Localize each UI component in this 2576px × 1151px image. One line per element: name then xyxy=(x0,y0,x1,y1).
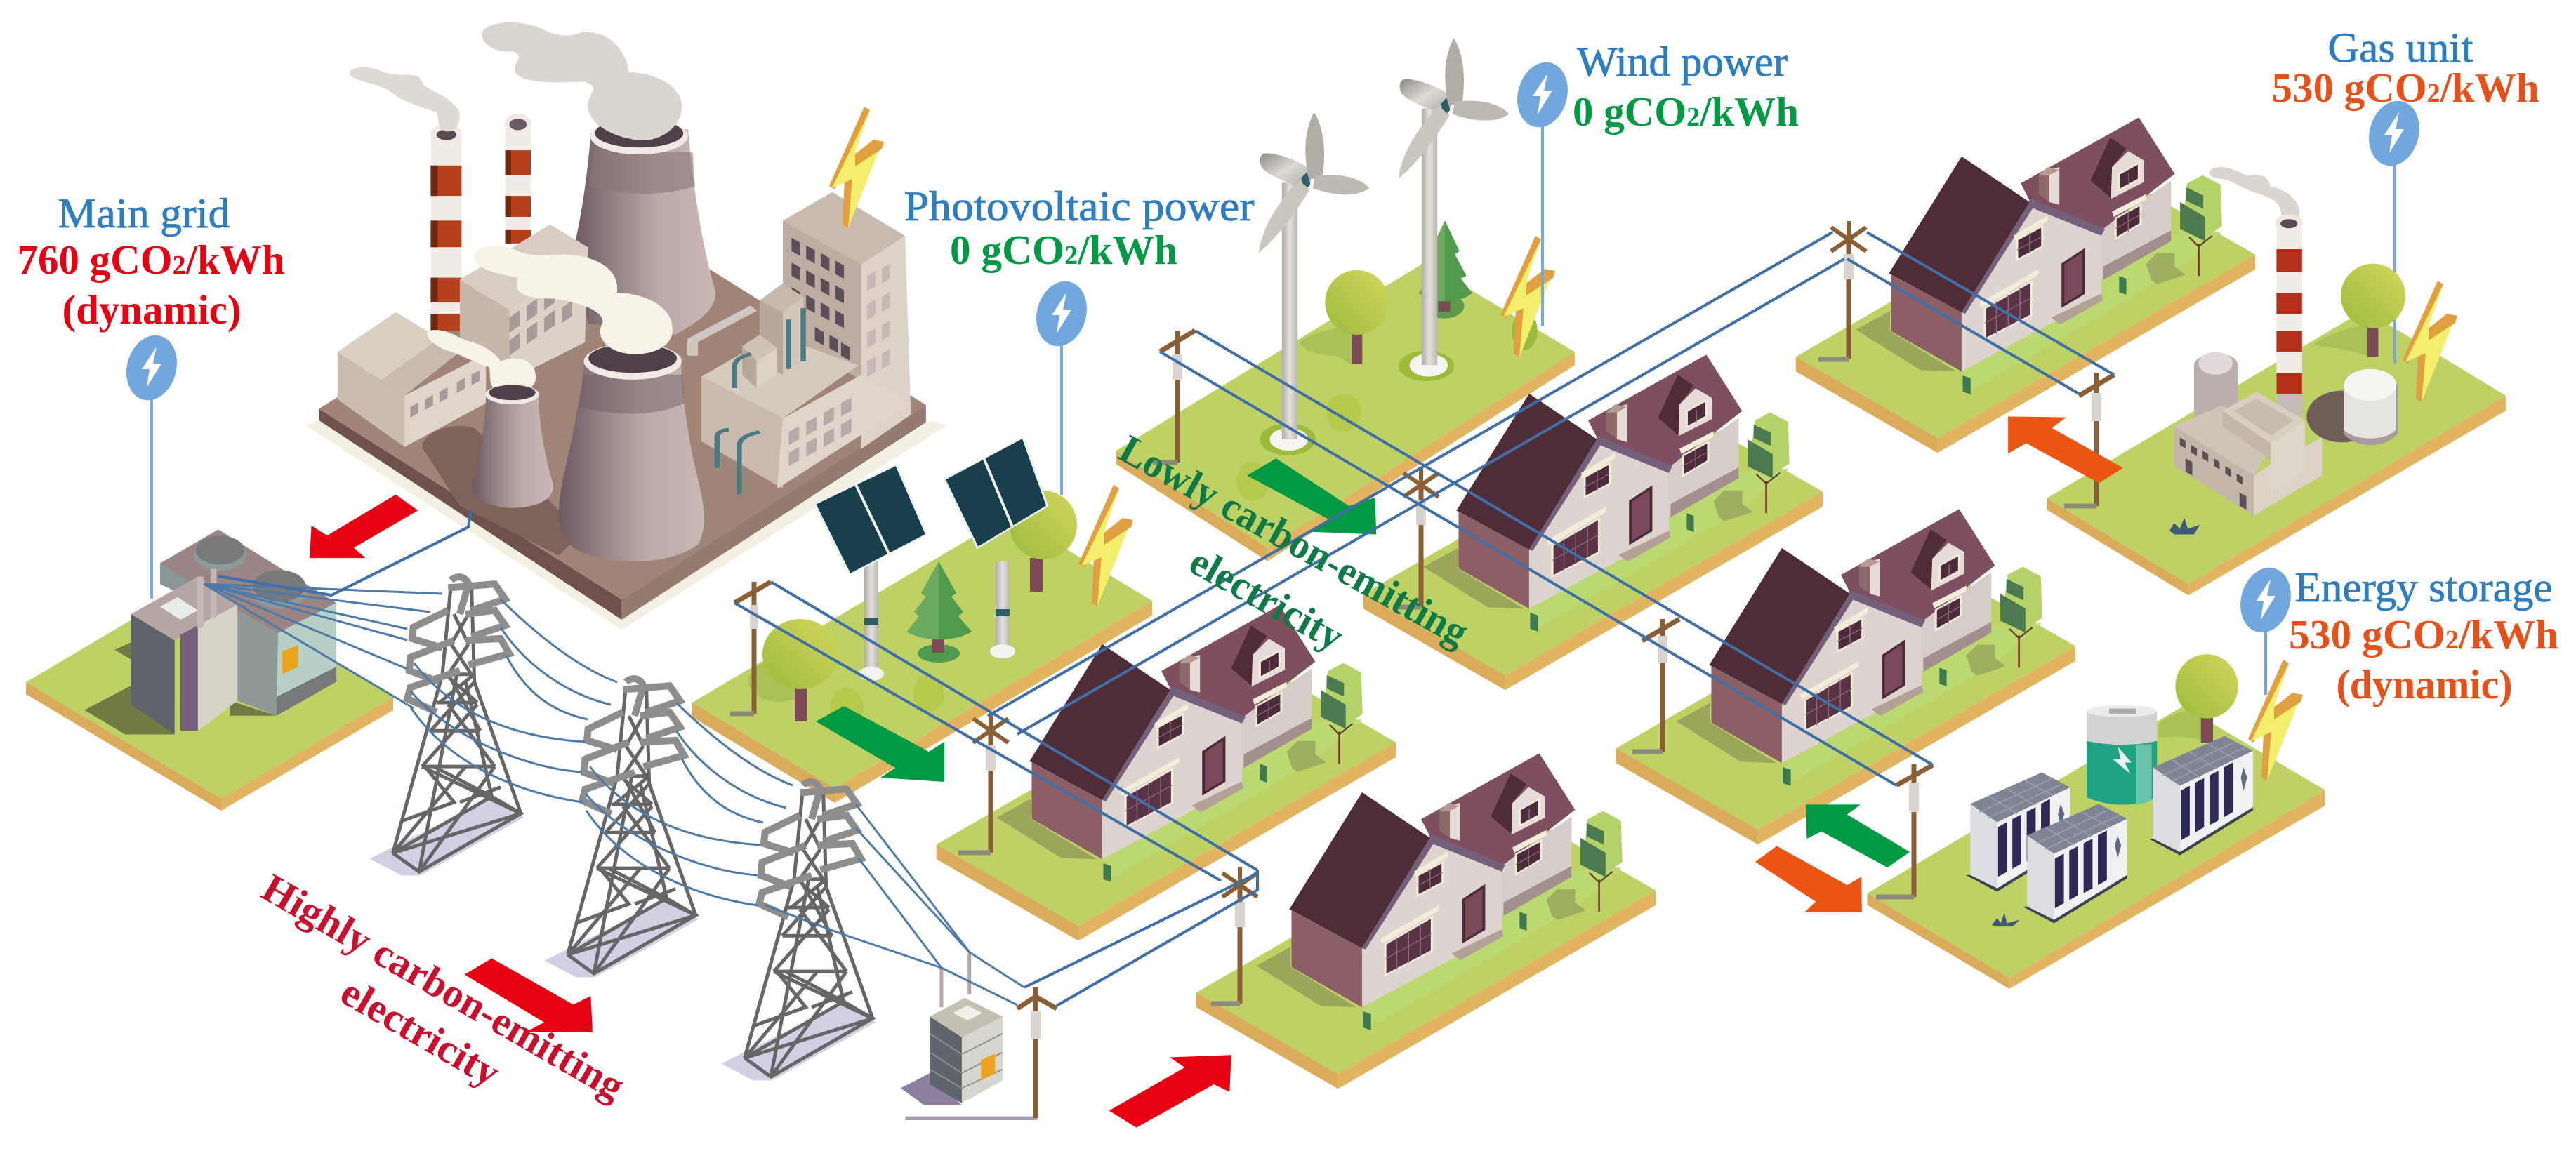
caption: highly carbon-emitting electricity: Highly carbon-emitting xyxy=(254,865,633,1109)
cooling tower: back xyxy=(574,118,715,335)
building: tall office block xyxy=(783,192,911,449)
gas tank round xyxy=(2306,369,2398,445)
icon: lightning bolt at gas unit xyxy=(2403,281,2457,402)
label: wind power xyxy=(1573,39,1799,135)
smoke: back tower xyxy=(482,22,682,140)
utility pole: photovoltaic xyxy=(730,582,771,714)
solar panel: right post xyxy=(990,561,1015,658)
wires: photovoltaic line to bottom pole xyxy=(734,582,1257,881)
tree: round xyxy=(1300,270,1389,365)
smoke: small tower xyxy=(428,330,536,393)
building: rear block xyxy=(460,225,588,380)
icon: lightning bolt at wind farm xyxy=(1500,236,1555,357)
wires: top house to gas pole xyxy=(1847,232,2114,394)
tree: pine xyxy=(1419,220,1472,319)
bushes xyxy=(1236,312,1538,501)
panel: house bottom xyxy=(1196,753,1656,1089)
chimney: right xyxy=(505,114,531,244)
icon: lightning bolt at photovoltaic xyxy=(1078,485,1133,606)
battery rack: front xyxy=(2023,804,2127,923)
battery rack: back left xyxy=(1966,773,2070,892)
panel: house storage side xyxy=(1616,509,2075,844)
smoke: left chimney xyxy=(349,67,460,131)
wires: transformer to tower 1 xyxy=(204,510,471,708)
icon: lightning bolt at storage xyxy=(2248,660,2303,781)
wires: tower 1 to tower 2 xyxy=(411,599,617,802)
panel: main grid tile xyxy=(26,580,393,811)
tree: round behind panel xyxy=(1010,491,1077,592)
utility pole: storage xyxy=(1876,764,1933,897)
building: left low block xyxy=(338,312,486,447)
building: front low block xyxy=(693,284,911,495)
icon: distribution meter box xyxy=(901,952,1038,1118)
caption: lowly carbon-emitting electricity: Lowly carbon-emitting xyxy=(1112,426,1476,655)
label: wind power: 0 gCO2/kWh xyxy=(1573,88,1799,135)
wind turbine: front xyxy=(1259,112,1369,455)
label: gas unit: Gas unit xyxy=(2328,25,2473,71)
gas unit smoke xyxy=(2210,167,2299,217)
panel: house left xyxy=(937,605,1396,940)
utility pole: meter xyxy=(1017,987,1057,1118)
grass tuft xyxy=(2169,518,2200,535)
wires: tower 2 to tower 3 xyxy=(586,703,793,905)
label: photovoltaic power xyxy=(904,183,1255,273)
cooling tower: small xyxy=(473,385,553,508)
tower: transmission 1 xyxy=(369,577,524,876)
grass tuft xyxy=(1992,912,2019,926)
plant base platform xyxy=(305,215,946,630)
wind turbine: rear xyxy=(1399,38,1509,381)
label: main grid: Main grid xyxy=(58,190,230,237)
arrow: red along transmission line xyxy=(465,958,593,1032)
battery cylinder xyxy=(2087,705,2157,805)
label: main grid: 760 gCO2/kWh xyxy=(17,237,284,283)
arrow: green from storage xyxy=(1806,804,1910,867)
panel: coal power plant xyxy=(305,22,946,630)
icon: transformer station xyxy=(84,529,336,735)
panel: photovoltaic tile xyxy=(692,437,1152,803)
panel: wind power tile xyxy=(1116,38,1575,561)
solar panel: right xyxy=(944,437,1048,547)
tree: pine xyxy=(907,561,972,663)
gas tower line xyxy=(2393,164,2396,364)
tree: left round xyxy=(748,619,838,721)
icon: lightning bolt at plant xyxy=(829,107,884,228)
wires: bottom pole to meter pole xyxy=(1024,870,1257,1006)
storage tree xyxy=(2158,654,2238,743)
arrow: orange to storage xyxy=(1755,846,1862,912)
label: energy storage: (dynamic) xyxy=(2337,661,2512,707)
solar panel: left post xyxy=(859,561,884,681)
pin: main grid xyxy=(119,330,184,599)
panel: house center xyxy=(1363,354,1823,690)
bushes xyxy=(830,675,944,727)
cooling tower: front xyxy=(559,343,704,561)
arrow: green from wind xyxy=(1247,458,1376,535)
pin: gas unit xyxy=(2362,95,2426,171)
label: gas unit: 530 gCO2/kWh xyxy=(2272,65,2539,111)
utility pole: top house xyxy=(1818,221,1866,359)
tower: transmission 2 xyxy=(544,679,699,978)
wires: wind line to storage pole xyxy=(1160,331,1933,785)
wires: left house to top house xyxy=(988,232,1844,734)
label: photovoltaic power: Photovoltaic power xyxy=(904,183,1255,229)
label: photovoltaic power: 0 gCO2/kWh xyxy=(950,227,1177,273)
solar panel: left xyxy=(815,465,927,574)
panel: gas unit tile xyxy=(2047,164,2506,595)
caption: lowly carbon-emitting electricity: electricity xyxy=(1182,538,1352,660)
utility pole: center house xyxy=(1394,467,1439,607)
gas unit tree xyxy=(2313,264,2405,357)
smoke: front tower xyxy=(474,246,673,354)
chimney: left xyxy=(430,124,462,331)
utility pole: bottom house xyxy=(1211,867,1257,1004)
battery rack: back right xyxy=(2148,736,2253,856)
utility pole: storage house xyxy=(1632,619,1679,752)
label: energy storage: 530 gCO2/kWh xyxy=(2289,611,2558,658)
caption: highly carbon-emitting electricity: electricity xyxy=(333,969,508,1096)
label: wind power: Wind power xyxy=(1577,39,1788,85)
label: energy storage: Energy storage xyxy=(2294,564,2553,611)
panel: house top right xyxy=(1796,117,2255,453)
label: main grid: (dynamic) xyxy=(62,286,242,333)
wires: tower 3 to meter xyxy=(765,804,1024,1005)
arrow: red to main grid xyxy=(310,495,418,558)
label: energy storage xyxy=(2289,564,2558,707)
arrow: green from photovoltaic xyxy=(816,706,944,782)
panel: energy storage tile xyxy=(1868,654,2325,989)
arrow: red to bottom house xyxy=(1109,1055,1231,1128)
gas plant building xyxy=(2174,352,2322,515)
tower: transmission 3 xyxy=(721,782,876,1081)
gas unit chimney xyxy=(2276,214,2303,416)
label: main grid xyxy=(17,190,284,333)
utility pole: gas unit xyxy=(2064,373,2114,506)
pin: wind xyxy=(1510,57,1575,326)
utility pole: left house xyxy=(958,712,1008,853)
arrow: orange from gas unit xyxy=(2008,416,2123,483)
label: gas unit xyxy=(2272,25,2539,111)
pin: photovoltaic xyxy=(1029,276,1094,495)
pin: energy storage xyxy=(2233,562,2298,695)
utility pole: wind xyxy=(1153,331,1195,463)
